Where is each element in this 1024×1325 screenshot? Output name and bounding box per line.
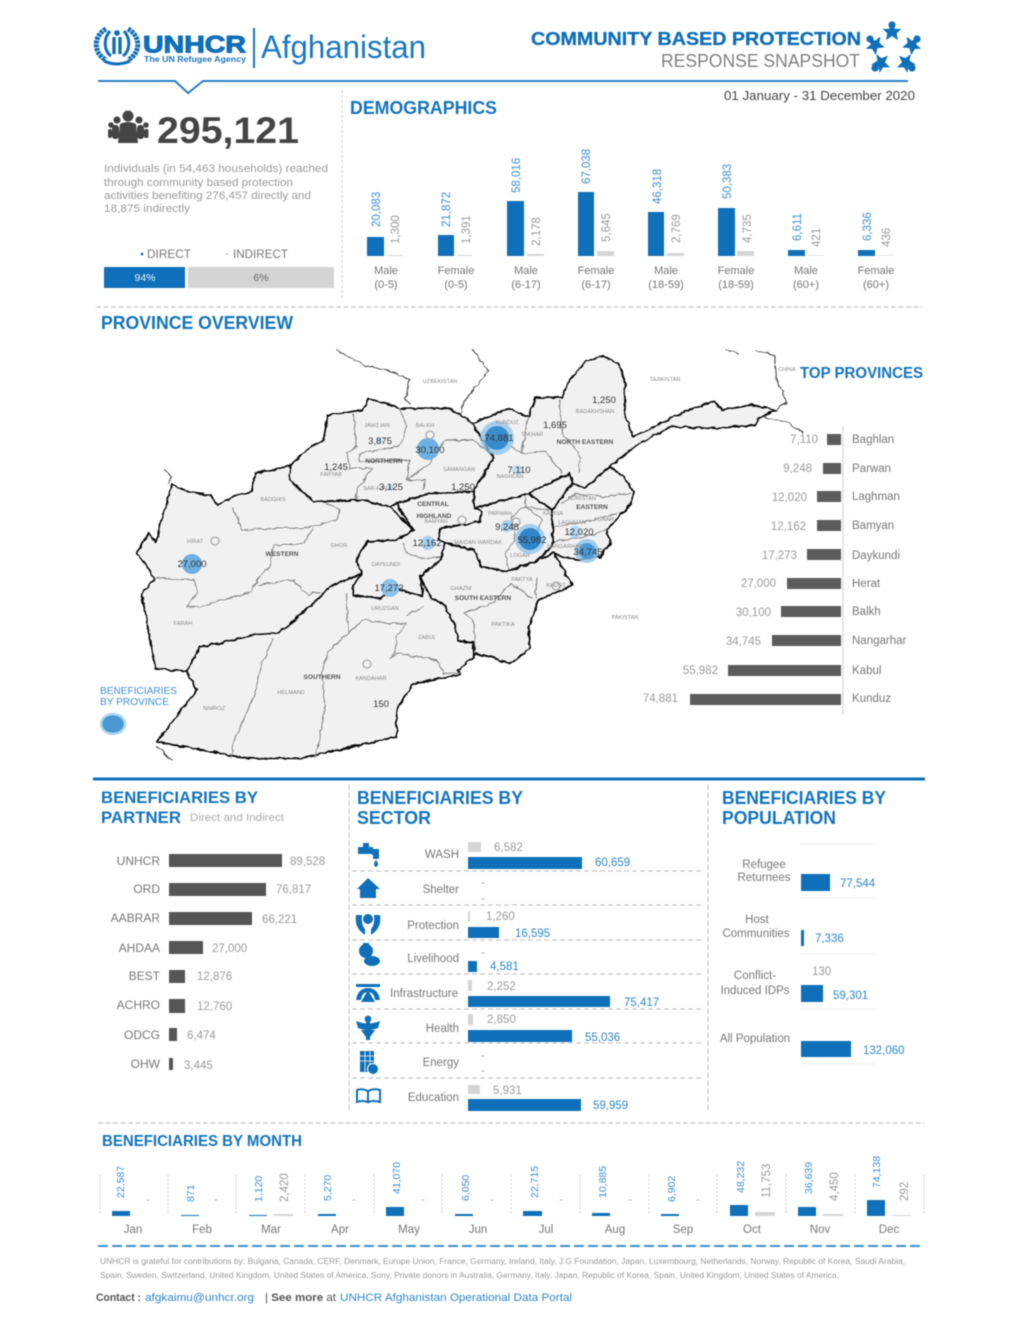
- agency tagline: The UN Refugee Agency: [144, 54, 246, 64]
- bar chart: demographics: (0-5): [444, 279, 468, 291]
- province name labels: NIMROZ: [203, 706, 226, 712]
- bar chart: beneficiaries by month: Apr: [331, 1224, 349, 1236]
- total figure: 295,121: [157, 110, 299, 151]
- province values: 3,875: [368, 436, 392, 447]
- province values: 9,248: [495, 522, 519, 533]
- footer: contact line: UNHCR Afghanistan Operational Data Portal: [340, 1292, 572, 1304]
- description: through community based protection: [104, 177, 293, 189]
- heading: partner: PARTNER: [101, 808, 181, 827]
- neighbouring country labels: PAKISTAN: [612, 615, 638, 621]
- report title: [531, 29, 861, 71]
- header rule with chevron: [98, 81, 908, 93]
- bar chart: beneficiaries by month: 22,587: [115, 1166, 127, 1198]
- bar chart: partners: 89,528: [290, 856, 325, 868]
- bar chart: top provinces: Nangarhar: [852, 635, 907, 647]
- bar chart: population bars: 130: [812, 966, 831, 978]
- province name labels: JAWZJAN: [364, 423, 390, 429]
- province values: 1,250: [592, 395, 616, 406]
- bar chart: population bars: [801, 874, 905, 1057]
- footer: contact line: afgkaimu@unhcr.org: [145, 1292, 254, 1304]
- bar chart: beneficiaries by month: 6,050: [460, 1175, 472, 1201]
- bar chart: partners: 12,876: [197, 971, 232, 983]
- bar chart: demographics: 21,872: [441, 192, 453, 227]
- bar chart: beneficiaries by month: Dec: [879, 1224, 899, 1236]
- bar chart: top provinces: Bamyan: [852, 520, 894, 532]
- province name labels: KHOST: [546, 583, 566, 589]
- province name labels: FARYAB: [320, 472, 342, 478]
- bar chart: beneficiaries by month: Jun: [469, 1224, 487, 1236]
- region labels: [266, 439, 614, 681]
- province name labels: LOGAR: [510, 553, 530, 559]
- bar chart: beneficiaries by month: 871: [185, 1184, 197, 1202]
- bar chart: demographics: 20,083: [371, 192, 383, 227]
- bar chart: top provinces: Parwan: [852, 463, 891, 475]
- province name labels: BAGHLAN: [497, 474, 523, 480]
- bar chart: partners: [111, 854, 325, 1072]
- province name labels: PARWAN: [488, 511, 512, 517]
- region labels: EASTERN: [576, 504, 608, 511]
- province values: 1,245: [324, 462, 348, 473]
- heading: population: BENEFICIARIES BY: [722, 788, 886, 808]
- UNHCR wordmark: UNHCR: [143, 32, 246, 58]
- bar chart: top provinces: 9,248: [783, 463, 812, 475]
- country name: Afghanistan: [261, 29, 426, 65]
- panel: total beneficiaries: [104, 110, 334, 288]
- bar chart: top provinces: 27,000: [741, 578, 776, 590]
- icon: energy: [360, 1051, 378, 1074]
- icon: protection hands: [356, 914, 380, 935]
- province values: 17,273: [374, 583, 404, 594]
- bar chart: demographics: [367, 149, 894, 291]
- bar chart: partners: 3,445: [184, 1060, 213, 1072]
- province name labels: MAIDAN WARDAK: [454, 540, 502, 546]
- bar chart: beneficiaries by month: -: [214, 1195, 218, 1206]
- indirect share bar: 6%: [253, 272, 269, 284]
- bar chart: beneficiaries by month: -: [490, 1195, 494, 1206]
- icon: health: [356, 1016, 380, 1040]
- bar chart: demographics: (18-59): [648, 279, 684, 291]
- bar chart: demographics: 67,038: [581, 149, 593, 184]
- bar chart: beneficiaries by month: -: [352, 1195, 356, 1206]
- bar chart: sector bars: 4,581: [490, 961, 519, 973]
- bar chart: demographics: 2,178: [531, 217, 543, 246]
- province name labels: NURISTAN: [568, 496, 596, 502]
- province name labels: TAKHAR: [521, 432, 543, 438]
- heading: sector: [357, 788, 523, 828]
- heading: population: POPULATION: [722, 808, 836, 828]
- province values: 34,745: [573, 547, 603, 558]
- bar chart: sector bars: -: [481, 1050, 485, 1062]
- bar chart: demographics: Male: [514, 265, 538, 277]
- bar chart: top provinces: [643, 425, 907, 715]
- bar chart: beneficiaries by month: Jan: [124, 1224, 142, 1236]
- neighbouring country labels: [423, 367, 796, 621]
- heading: sector: BENEFICIARIES BY: [357, 788, 523, 808]
- bar chart: beneficiaries by month: 22,715: [529, 1166, 541, 1198]
- bar chart: demographics: 6,336: [862, 212, 874, 241]
- heading: demographics: DEMOGRAPHICS: [350, 98, 497, 118]
- bar chart: population bars: 77,544: [840, 878, 876, 890]
- province name labels: KUNAR: [594, 517, 614, 523]
- bar chart: beneficiaries by month: -: [628, 1195, 632, 1206]
- province name labels: PAKTYA: [511, 577, 533, 583]
- bar chart: beneficiaries by month: 41,070: [391, 1162, 403, 1194]
- bar chart: sector bars: -: [481, 1065, 485, 1077]
- population labels: Communities: [722, 928, 790, 940]
- region labels: WESTERN: [266, 551, 299, 558]
- bar chart: partners: ACHRO: [117, 998, 160, 1012]
- neighbouring country labels: UZBEKISTAN: [423, 379, 457, 385]
- bar chart: population bars: 59,301: [833, 990, 868, 1002]
- bar chart: top provinces: 34,745: [726, 636, 761, 648]
- title line two: RESPONSE SNAPSHOT: [661, 51, 860, 71]
- map legend: [100, 686, 177, 734]
- icon: livelihood: [359, 943, 380, 966]
- sector labels: [390, 849, 459, 1104]
- sector labels: Energy: [423, 1057, 459, 1069]
- neighbouring country labels: CHINA: [778, 367, 796, 373]
- bar chart: top provinces: 55,982: [683, 665, 718, 677]
- population labels: Induced IDPs: [720, 985, 790, 997]
- bar chart: demographics: Female: [858, 265, 894, 277]
- icon: people group: [108, 110, 149, 143]
- bar chart: top provinces: 17,273: [762, 550, 797, 562]
- header: logo and country title: [96, 28, 426, 68]
- bar chart: partners: 12,760: [197, 1001, 232, 1013]
- sector labels: Shelter: [423, 884, 459, 896]
- icon: education book: [357, 1089, 380, 1102]
- bar chart: demographics: 436: [881, 228, 893, 247]
- bar chart: demographics: Male: [794, 265, 818, 277]
- bar chart: top provinces: Baghlan: [852, 434, 894, 446]
- region labels: SOUTH EASTERN: [455, 595, 511, 602]
- bar chart: beneficiaries by month: 11,753: [761, 1164, 773, 1198]
- province name labels: BADAKHSHAN: [576, 409, 614, 415]
- map legend: BY PROVINCE: [100, 697, 169, 708]
- bar chart: sector bars: -: [481, 877, 485, 889]
- bar chart: demographics: 46,318: [652, 169, 664, 204]
- bar chart: partners: 6,474: [187, 1030, 216, 1042]
- region labels: HIGHLAND: [417, 513, 452, 520]
- map legend: BENEFICIARIES: [100, 686, 177, 697]
- sector labels: Protection: [407, 920, 459, 932]
- title line one: COMMUNITY BASED PROTECTION: [531, 29, 861, 49]
- heading: province overview: PROVINCE OVERVIEW: [101, 313, 293, 333]
- bar chart: top provinces: 74,881: [643, 693, 678, 705]
- province values: 1,250: [451, 482, 475, 493]
- bar chart: sector bars: 1,260: [486, 911, 515, 923]
- province name labels: FARAH: [174, 621, 192, 627]
- province values: 12,020: [564, 527, 594, 538]
- bar chart: sector bars: 2,252: [487, 981, 516, 993]
- date range: 01 January - 31 December 2020: [724, 88, 915, 103]
- bar chart: partners: 27,000: [212, 943, 247, 955]
- bar chart: top provinces: Daykundi: [852, 550, 900, 562]
- province bubbles: [182, 421, 599, 597]
- bar chart: top provinces: 7,110: [790, 434, 818, 446]
- province name labels: URUZGAN: [371, 606, 399, 612]
- province values: 7,110: [507, 465, 531, 476]
- bar chart: beneficiaries by month: 74,138: [871, 1156, 883, 1188]
- panel: beneficiaries by population: [720, 788, 905, 1064]
- indirect share bar: [188, 267, 334, 288]
- province name labels: KANDAHAR: [355, 676, 387, 682]
- bar chart: demographics: (18-59): [718, 279, 754, 291]
- bar chart: beneficiaries by month: Jul: [539, 1224, 553, 1236]
- bar chart: beneficiaries by month: 6,902: [666, 1176, 678, 1202]
- direct share bar: [104, 267, 185, 288]
- population labels: Conflict-: [734, 970, 776, 982]
- province name labels: HIRAT: [187, 539, 204, 545]
- icon: infrastructure: [356, 984, 380, 1002]
- region labels: CENTRAL: [417, 501, 449, 508]
- bar chart: sector bars: -: [481, 893, 485, 905]
- panel: beneficiaries by sector: [352, 788, 702, 1112]
- sector labels: Education: [408, 1092, 459, 1104]
- province name labels: BAMYAN: [424, 519, 448, 525]
- bar chart: top provinces: 30,100: [736, 607, 771, 619]
- province name labels: NANGARHAR: [547, 544, 583, 550]
- neighbouring country labels: TAJIKISTAN: [650, 377, 680, 383]
- bar chart: sector bars: -: [481, 947, 485, 959]
- population labels: Host: [745, 914, 770, 926]
- bar chart: sector bars: 55,036: [585, 1032, 620, 1044]
- bar chart: top provinces: Balkh: [852, 606, 881, 618]
- bar chart: top provinces: 12,020: [772, 492, 807, 504]
- bar chart: beneficiaries by month: 5,270: [322, 1175, 334, 1201]
- bar chart: partners: UNHCR: [117, 854, 160, 868]
- bar chart: beneficiaries by month: 48,232: [735, 1161, 747, 1193]
- bar chart: beneficiaries by month: -: [696, 1195, 700, 1206]
- legend: direct and indirect: [141, 249, 288, 261]
- sector labels: Livelihood: [407, 953, 459, 965]
- bar chart: sector bars: 75,417: [624, 997, 659, 1009]
- population labels: Refugee: [742, 859, 786, 871]
- province name labels: PAKTIKA: [491, 622, 515, 628]
- bar chart: demographics: 50,383: [722, 164, 734, 199]
- province values: 1,695: [543, 420, 567, 431]
- province name labels: KAPISA: [543, 511, 563, 517]
- bar chart: sector bars: 6,582: [494, 842, 523, 854]
- bar chart: demographics: Female: [578, 265, 614, 277]
- bar chart: top provinces: Laghman: [852, 491, 900, 503]
- bar chart: demographics: (0-5): [374, 279, 398, 291]
- province name labels: [174, 409, 614, 712]
- legend: direct and indirect: INDIRECT: [233, 249, 288, 261]
- province name labels: LAGHMAN: [558, 520, 586, 526]
- bar chart: partners: ORD: [133, 882, 160, 896]
- region labels: NORTHERN: [365, 458, 403, 465]
- bar chart: demographics: 58,016: [511, 158, 523, 193]
- heading: population: [722, 788, 886, 828]
- legend: direct and indirect: DIRECT: [147, 249, 191, 261]
- bar chart: sector bars: 2,850: [487, 1014, 516, 1026]
- footer: contact line: | See more at: [265, 1292, 336, 1304]
- province name labels: SAR-E-PUL: [363, 486, 393, 492]
- heading: sector: SECTOR: [357, 808, 431, 828]
- province values: [177, 395, 616, 710]
- direct share bar: 94%: [134, 272, 156, 284]
- bar chart: demographics: Female: [438, 265, 474, 277]
- bar chart: sector bars: 59,959: [593, 1100, 628, 1112]
- description: Individuals (in 54,463 households) reached: [104, 163, 328, 175]
- bar chart: partners: AABRAR: [111, 911, 160, 925]
- bar chart: beneficiaries by month: 36,639: [803, 1162, 815, 1194]
- bar chart: sector bars: 60,659: [595, 857, 630, 869]
- map shapes and borders: [137, 350, 803, 760]
- bar chart: beneficiaries by month: 292: [899, 1182, 911, 1201]
- bar chart: population bars: 7,336: [815, 933, 844, 945]
- province name labels: GHOR: [331, 543, 347, 549]
- bar chart: beneficiaries by month: -: [146, 1195, 150, 1206]
- province name labels: ZABUL: [418, 635, 436, 641]
- province name labels: BADGHIS: [260, 497, 286, 503]
- province name labels: BALKH: [416, 423, 434, 429]
- icon: community stars: [861, 21, 926, 74]
- province values: 27,000: [177, 559, 207, 570]
- bar chart: beneficiaries by month: Nov: [810, 1224, 830, 1236]
- province values: 12,162: [412, 538, 442, 549]
- footer: contact line: Contact :: [96, 1292, 141, 1304]
- bar chart: demographics: 5,645: [601, 213, 613, 242]
- bar chart: beneficiaries by month: 4,450: [829, 1172, 841, 1201]
- bar chart: partners: BEST: [129, 969, 161, 983]
- province name labels: SAMANGAN: [443, 467, 475, 473]
- bar chart: demographics: Female: [718, 265, 754, 277]
- bar chart: beneficiaries by month: Sep: [673, 1224, 693, 1236]
- sector labels: Infrastructure: [390, 988, 458, 1000]
- bar chart: partners: 66,221: [262, 914, 297, 926]
- description: [104, 163, 328, 215]
- panel: beneficiaries by partner: [101, 788, 325, 1072]
- icon: shelter: [357, 878, 380, 898]
- bar chart: demographics: 6,611: [792, 213, 804, 241]
- bar chart: population bars: 132,060: [863, 1045, 905, 1057]
- province values: 74,881: [484, 433, 514, 444]
- logo divider: [253, 28, 255, 68]
- icon: water tap: [358, 843, 379, 867]
- bar chart: beneficiaries by month: 10,885: [597, 1166, 609, 1198]
- sector labels: WASH: [425, 849, 459, 861]
- bar chart: partners: 76,817: [276, 884, 311, 896]
- footer: contact line: [96, 1292, 572, 1304]
- description: activities benefiting 276,457 directly and: [104, 190, 311, 202]
- footer: donor acknowledgement: Spain, Sweden, Switzerland, United Kingdom, United States of America, Sony, Private donors in Australia, Germany, Italy, Japan, Republic of Korea, Spain, United Kingdom, United States of America.: [100, 1271, 839, 1280]
- bar chart: sector bars: [468, 842, 659, 1112]
- region labels: SOUTHERN: [304, 674, 341, 681]
- bar chart: beneficiaries by month: 2,420: [279, 1173, 291, 1202]
- icon: UNHCR emblem: [96, 29, 138, 64]
- province name labels: DAYKUNDI: [372, 562, 401, 568]
- bar chart: beneficiaries by month: Aug: [605, 1224, 625, 1236]
- bar chart: beneficiaries by month: 1,120: [253, 1176, 265, 1202]
- province name labels: HELMAND: [277, 690, 305, 696]
- region labels: NORTH EASTERN: [557, 439, 614, 446]
- province name labels: GHAZNI: [450, 586, 472, 592]
- population labels: Returnees: [737, 872, 791, 884]
- bar chart: demographics: Male: [654, 265, 678, 277]
- province values: 30,100: [415, 445, 445, 456]
- heading: partner: BENEFICIARIES BY: [101, 788, 259, 807]
- bar chart: partners: OHW: [131, 1057, 161, 1071]
- bar chart: demographics: 4,735: [742, 214, 754, 243]
- bar chart: partners: AHDAA: [119, 941, 160, 955]
- bar chart: partners: ODCG: [124, 1028, 160, 1042]
- map: Afghanistan provinces: [100, 350, 803, 760]
- heading: partner: [101, 788, 284, 827]
- population labels: All Population: [720, 1033, 790, 1045]
- heading: top provinces: TOP PROVINCES: [800, 365, 923, 382]
- bar chart: beneficiaries by month: -: [559, 1195, 563, 1206]
- bar chart: top provinces: Kunduz: [852, 693, 891, 705]
- province values: 3,125: [379, 482, 403, 493]
- bar chart: demographics: (60+): [793, 279, 819, 291]
- province values: 55,982: [517, 535, 547, 546]
- bar chart: demographics: Male: [374, 265, 398, 277]
- province name labels: KUNDUZ: [495, 420, 519, 426]
- bar chart: demographics: (6-17): [511, 279, 541, 291]
- city markers: [211, 431, 560, 668]
- bar chart: beneficiaries by month: Oct: [743, 1224, 762, 1236]
- heading: beneficiaries by month: BENEFICIARIES BY MONTH: [102, 1133, 302, 1150]
- bar chart: beneficiaries by month: [100, 1156, 924, 1236]
- bar chart: beneficiaries by month: Mar: [261, 1224, 281, 1236]
- bar chart: demographics: 1,300: [390, 215, 402, 244]
- bar chart: demographics: 1,391: [461, 215, 473, 244]
- sector labels: Health: [426, 1023, 459, 1035]
- bar chart: sector bars: 16,595: [515, 928, 550, 940]
- bar chart: demographics: 2,769: [671, 214, 683, 243]
- heading: partner: Direct and Indirect: [190, 812, 284, 824]
- bar chart: beneficiaries by month: May: [398, 1224, 420, 1236]
- description: 18,875 indirectly: [104, 203, 191, 215]
- bar chart: beneficiaries by month: -: [421, 1195, 425, 1206]
- province values: 150: [373, 699, 389, 710]
- bar chart: beneficiaries by month: Feb: [192, 1224, 212, 1236]
- footer: donor acknowledgement: [100, 1257, 905, 1280]
- bar chart: top provinces: 12,162: [771, 521, 806, 533]
- bar chart: demographics: (6-17): [581, 279, 611, 291]
- bar chart: sector bars: 5,931: [493, 1085, 522, 1097]
- bar chart: demographics: (60+): [863, 279, 889, 291]
- population labels: [720, 859, 791, 1045]
- bar chart: top provinces: Herat: [852, 578, 881, 590]
- bar chart: top provinces: Kabul: [852, 665, 881, 677]
- bar chart: demographics: 421: [811, 228, 823, 247]
- footer: donor acknowledgement: UNHCR is grateful for contributions by: Bulgaria, Canada, CERF, Denmark, Europe Union, France, Germany, Ireland, Italy, J.G Foundation, Japan, Luxembourg, Netherlands, Norway, Republic of Korea, Saudi Arabia,: [100, 1257, 905, 1266]
